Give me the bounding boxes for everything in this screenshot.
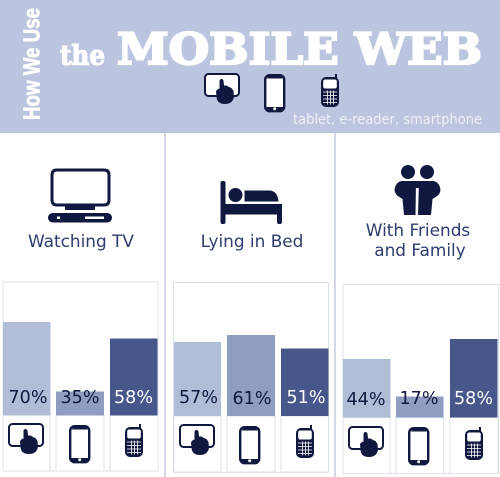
panel: watching TV xyxy=(3,170,158,471)
bar: e-reader 17% xyxy=(396,389,444,418)
title: MOBILE WEB: MOBILE WEB xyxy=(117,25,482,75)
bar: tablet 70% xyxy=(3,322,50,416)
bar: smartphone 51%: 51% xyxy=(287,388,325,408)
bar chart xyxy=(343,284,498,474)
panel: lying in bed xyxy=(174,181,328,472)
bar: e-reader 61% xyxy=(227,335,275,416)
icon: tablet xyxy=(180,425,214,455)
icon: smartphone xyxy=(465,427,483,460)
heading line 2: and Family xyxy=(374,240,466,260)
heading: Lying in Bed xyxy=(201,231,303,251)
icon: e-reader xyxy=(240,427,259,464)
header banner xyxy=(0,0,500,133)
icon: television xyxy=(48,170,112,222)
icon: smartphone xyxy=(321,74,339,107)
title: the: the xyxy=(60,40,105,72)
heading: With Friends xyxy=(366,220,470,240)
bar: smartphone 58% xyxy=(450,339,498,418)
icon: e-reader xyxy=(70,426,89,462)
bar: tablet 44% xyxy=(343,359,390,418)
bar: smartphone 58% xyxy=(110,338,158,416)
icon: tablet xyxy=(205,74,239,104)
bar: tablet 57% xyxy=(174,342,221,416)
bar: e-reader 35% xyxy=(56,388,104,416)
heading: Watching TV xyxy=(28,231,134,251)
bar: smartphone 58%: 58% xyxy=(454,389,493,409)
icon: smartphone xyxy=(296,425,314,458)
bar: smartphone 51% xyxy=(281,348,328,416)
bar: e-reader 61%: 61% xyxy=(233,389,271,409)
bar: e-reader 17%: 17% xyxy=(400,389,438,409)
icon: e-reader xyxy=(265,75,284,112)
bar chart xyxy=(3,282,158,471)
bar: smartphone 58%: 58% xyxy=(114,388,153,408)
bar: e-reader 35%: 35% xyxy=(61,388,99,408)
panel: with friends and family xyxy=(343,165,498,474)
bar chart xyxy=(174,282,328,472)
icon: tablet xyxy=(349,427,383,457)
icon: tablet xyxy=(9,424,43,454)
bar: tablet 44%: 44% xyxy=(347,390,385,410)
icon: bed xyxy=(220,181,282,224)
bar: tablet 57%: 57% xyxy=(179,388,218,408)
icon: two people xyxy=(395,165,440,215)
subtitle: tablet, e-reader, smartphone xyxy=(293,112,482,128)
icon: e-reader xyxy=(409,428,428,464)
icon: smartphone xyxy=(125,424,143,457)
bar: tablet 70%: 70% xyxy=(9,388,47,408)
